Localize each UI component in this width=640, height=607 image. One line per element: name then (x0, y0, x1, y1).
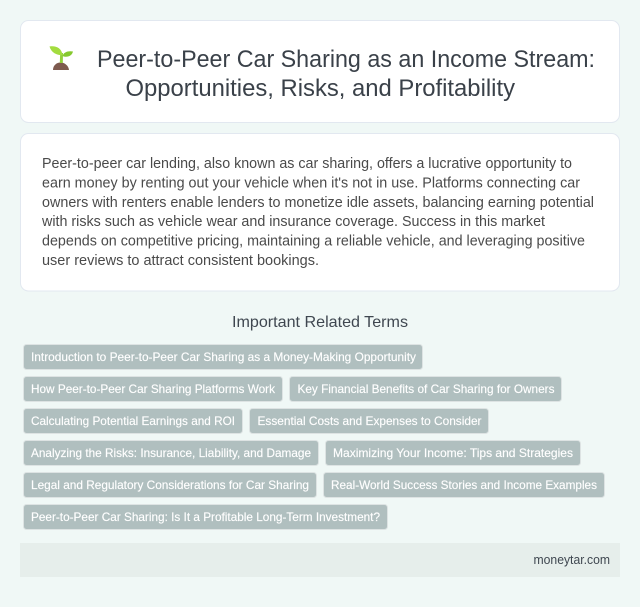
tag: success stories (324, 472, 604, 498)
tag: maximizing income: Maximizing Your Income: Tips and Strategies (333, 446, 573, 460)
tag: long-term investment: Peer-to-Peer Car Sharing: Is It a Profitable Long-Term Investment? (31, 510, 380, 524)
paragraph line 6: user reviews to attract consistent bookings. (42, 253, 319, 269)
footer source text: moneytar.com (534, 552, 610, 567)
tag: legal considerations (24, 472, 316, 498)
tag: legal considerations: Legal and Regulatory Considerations for Car Sharing (31, 478, 309, 492)
paragraph line 5: depends on competitive pricing, maintaining a reliable vehicle, and leveraging positive (42, 234, 585, 250)
footer bar (20, 543, 620, 577)
panel: title header (20, 20, 620, 122)
paragraph line 2: earn money by renting out your vehicle when it's not in use. Platforms connecting car (42, 175, 580, 191)
heading: important related terms: Important Related Terms (232, 314, 408, 331)
tag: costs and expenses: Essential Costs and Expenses to Consider (258, 414, 482, 428)
tag: success stories: Real-World Success Stories and Income Examples (331, 478, 597, 492)
tag: financial benefits: Key Financial Benefits of Car Sharing for Owners (298, 382, 554, 396)
tag: earnings and ROI (24, 408, 242, 434)
tag: long-term investment (24, 504, 388, 530)
tag: costs and expenses (250, 408, 488, 434)
paragraph line 1: Peer-to-peer car lending, also known as car sharing, offers a lucrative opportunity to (42, 156, 572, 172)
tag: risks (24, 440, 318, 466)
panel: summary paragraph (20, 134, 620, 291)
tag: earnings and ROI: Calculating Potential Earnings and ROI (31, 414, 235, 428)
icon: seedling (50, 46, 73, 70)
tag: how platforms work (24, 376, 282, 402)
tag: introduction: Introduction to Peer-to-Peer Car Sharing as a Money-Making Opportunity (31, 350, 416, 364)
tag: how platforms work: How Peer-to-Peer Car Sharing Platforms Work (31, 382, 276, 396)
title line 1: Peer-to-Peer Car Sharing as an Income Stream: (97, 46, 595, 73)
tag: risks: Analyzing the Risks: Insurance, Liability, and Damage (31, 446, 311, 460)
tag: financial benefits (290, 376, 562, 402)
tag: maximizing income (326, 440, 580, 466)
tag: introduction (24, 344, 422, 370)
paragraph line 4: with risks such as vehicle wear and insurance coverage. Success in this market (41, 214, 545, 230)
paragraph line 3: owners with renters enable lenders to monetize idle assets, balancing earning potential (42, 195, 594, 211)
title line 2: Opportunities, Risks, and Profitability (126, 75, 515, 102)
